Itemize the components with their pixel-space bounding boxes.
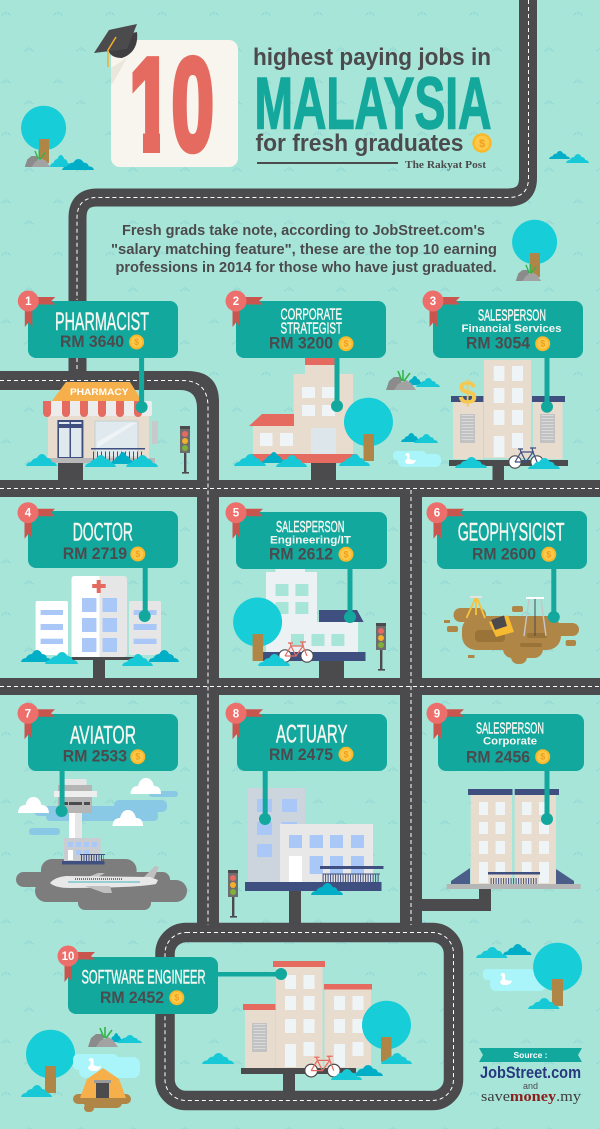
icon: traffic light 1	[180, 426, 190, 474]
big number 10: 10	[129, 31, 214, 178]
panel 3: salesperson financial services: SALESPERSON	[478, 307, 546, 324]
panel 9: salesperson corporate: $	[540, 752, 545, 762]
panel 8: actuary: $	[343, 749, 349, 759]
decoration: bottom left tree, rocks, pond and hut	[21, 1027, 142, 1112]
scene: airport control tower and plane	[16, 778, 187, 910]
panel 9: salesperson corporate: SALESPERSON	[476, 720, 544, 737]
rank ribbon 8	[226, 703, 263, 739]
building: pharmacy	[26, 382, 158, 467]
rank ribbon 2: 2	[233, 296, 239, 308]
panel 3: salesperson financial services: Financial Services	[462, 323, 562, 335]
rank ribbon 5: 5	[233, 508, 240, 520]
rank ribbon 1: 1	[25, 296, 32, 308]
icon: graduation cap	[94, 24, 137, 67]
panel 8: actuary: ACTUARY	[276, 720, 348, 748]
rank ribbon 6: 6	[434, 508, 440, 520]
panel 2: corporate strategist: STRATEGIST	[280, 320, 342, 337]
panel 10: software engineer: RM 2452	[100, 989, 164, 1007]
panel 2: corporate strategist: $	[343, 339, 349, 349]
panel 10: software engineer: SOFTWARE ENGINEER	[82, 968, 206, 989]
rank ribbon 5	[226, 502, 263, 539]
icon: header coin	[472, 133, 492, 153]
panel 10: software engineer: $	[174, 993, 179, 1003]
panel 2: corporate strategist: CORPORATE	[280, 306, 342, 323]
panel 3: salesperson financial services: RM 3054	[466, 334, 531, 352]
title line 1: highest paying jobs in	[253, 44, 491, 71]
panel 8: actuary	[226, 703, 387, 825]
icon: header coin: $	[479, 138, 485, 150]
intro text: professions in 2014 for those who have just graduated.	[116, 259, 496, 276]
panel 5: salesperson engineering: SALESPERSON	[276, 519, 344, 536]
panel 4: doctor: $	[135, 549, 140, 559]
panel 8: actuary: RM 2475	[269, 746, 333, 764]
rank ribbon 7: 7	[25, 708, 31, 720]
rank ribbon 2	[226, 290, 263, 327]
shop sign text: PHARMACY	[70, 387, 128, 397]
source block: Source :	[513, 1050, 548, 1060]
rank ribbon 9: 9	[434, 708, 440, 720]
panel 7: aviator: RM 2533	[63, 748, 127, 766]
credit: The Rakyat Post: The Rakyat Post	[405, 159, 486, 171]
rank ribbon 1	[18, 290, 55, 327]
panel 5: salesperson engineering	[226, 502, 387, 623]
intro text: "salary matching feature", these are the top 10 earning	[111, 241, 497, 258]
panel 7: aviator: AVIATOR	[70, 722, 136, 750]
panel 7: aviator: $	[135, 752, 140, 762]
panel 1: pharmacist	[18, 290, 178, 413]
header tile with big 10	[111, 31, 238, 178]
panel 1: pharmacist: $	[134, 337, 139, 347]
decoration: rocks and pond centre	[386, 370, 441, 467]
panel 4: doctor: RM 2719	[63, 545, 127, 563]
rank ribbon 4: 4	[25, 508, 32, 520]
panel 2: corporate strategist	[226, 290, 386, 412]
rank ribbon 3	[422, 290, 460, 327]
panel 9: salesperson corporate: RM 2456	[466, 748, 530, 766]
building: financial services tower	[449, 360, 568, 469]
panel 3: salesperson financial services: $	[540, 339, 545, 349]
panel 9: salesperson corporate	[426, 703, 584, 825]
panel 5: salesperson engineering: Engineering/IT	[270, 534, 351, 546]
panel 6: geophysicist	[426, 502, 587, 623]
rank ribbon 10	[58, 946, 95, 982]
icon: traffic light 3	[228, 870, 238, 918]
panel 3: salesperson financial services	[422, 290, 583, 413]
decoration: top left tree and rocks	[21, 106, 94, 170]
panel 9: salesperson corporate: Corporate	[483, 735, 537, 747]
panel 5: salesperson engineering: RM 2612	[269, 546, 333, 564]
panel 1: pharmacist: PHARMACIST	[55, 308, 149, 336]
panel 4: doctor: DOCTOR	[73, 518, 133, 546]
rank ribbon 3: 3	[430, 296, 436, 308]
building: actuary offices	[245, 788, 384, 895]
intro text: Fresh grads take note, according to JobStreet.com's	[122, 222, 485, 239]
source block: and	[523, 1081, 538, 1091]
icon: red cross	[92, 580, 106, 593]
icon: airplane	[50, 866, 159, 893]
panel 4: doctor	[18, 502, 178, 622]
icon: dollar sign: $	[458, 374, 477, 411]
rank ribbon 8: 8	[233, 708, 240, 720]
building: software engineer offices	[202, 961, 412, 1080]
source block	[479, 1048, 582, 1105]
source block: JobStreet.com	[480, 1063, 581, 1082]
scene: geophysicist dig site	[444, 596, 579, 664]
panel 2: corporate strategist: RM 3200	[269, 334, 333, 352]
source block: savemoney.my	[481, 1089, 582, 1105]
rank ribbon 10: 10	[62, 951, 74, 963]
decoration: top right bushes	[549, 151, 589, 163]
rank ribbon 6	[426, 502, 464, 539]
rank ribbon 7	[18, 703, 55, 739]
panel 1: pharmacist: RM 3640	[60, 333, 124, 351]
intro text	[111, 222, 497, 276]
rank ribbon 4	[18, 502, 55, 539]
panel 10: software engineer	[58, 946, 287, 1014]
decoration: tree beside intro	[512, 220, 557, 281]
building: corporate twin towers	[447, 789, 581, 889]
decoration: bottom right tree and pond	[476, 943, 582, 1009]
panel 7: aviator	[18, 703, 178, 817]
rank ribbon 9	[426, 703, 464, 739]
panel 5: salesperson engineering: $	[343, 549, 349, 559]
title line 3: for fresh graduates	[256, 130, 464, 157]
building: corporate office with tree	[234, 358, 393, 467]
panel 6: geophysicist: $	[546, 549, 551, 559]
building: engineering office with tree	[233, 569, 366, 666]
icon: traffic light 2	[376, 623, 386, 671]
building: hospital	[21, 576, 179, 666]
panel 6: geophysicist: RM 2600	[472, 546, 536, 564]
